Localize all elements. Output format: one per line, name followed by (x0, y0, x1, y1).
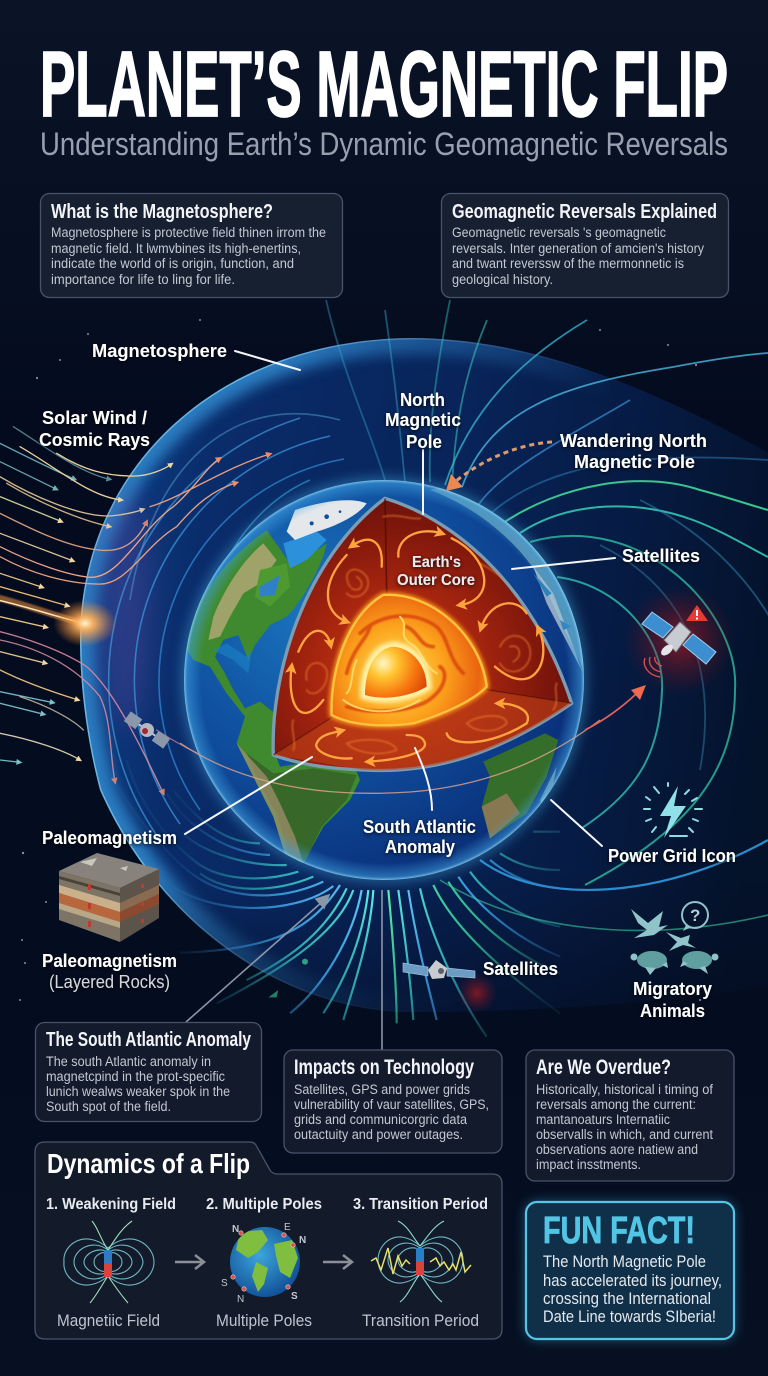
scene labels: Satellites (622, 546, 700, 566)
icon: power grid (644, 783, 702, 838)
scene labels: Pole (406, 432, 442, 452)
panel: south atlantic anomaly: The South Atlantic Anomaly (46, 1029, 252, 1051)
icon: globe with multiple poles (221, 1222, 306, 1305)
panel: what is the magnetosphere: indicate the world of is origin, function, and (51, 256, 294, 271)
scene labels: Solar Wind / (42, 408, 147, 428)
panel: what is the magnetosphere: magnetic field. It lwmvbines its high-enertins, (51, 241, 301, 256)
panel: south atlantic anomaly: The south Atlantic anomaly in (46, 1054, 211, 1069)
panel: dynamics of a flip: Multiple Poles (216, 1311, 312, 1330)
callout: fun fact: has accelerated its journey, (543, 1272, 722, 1290)
small bird (666, 932, 696, 951)
question bubble: ? (690, 906, 700, 925)
panel: impacts on technology: Impacts on Technology (294, 1056, 474, 1079)
panel: dynamics of a flip: Transition Period (362, 1311, 479, 1330)
icon: magnet with noisy transition (371, 1221, 471, 1302)
panel: impacts on technology: Satellites, GPS and power grids (294, 1082, 470, 1097)
scene labels: (Layered Rocks) (49, 972, 170, 992)
panel: south atlantic anomaly: magnetcpind in the prot-specific (46, 1069, 225, 1084)
panel: what is the magnetosphere: Magnetosphere is protective field thinen irrom the (51, 225, 326, 240)
panel: impacts on technology: grids and communicorgric data (294, 1112, 467, 1127)
callout: fun fact (526, 1202, 734, 1339)
panel: are we overdue: impact insstments. (536, 1157, 641, 1172)
panel: geomagnetic reversals explained: geological history. (452, 272, 553, 287)
dashed orange arrow: wandering pole (446, 442, 552, 491)
panel: dynamics of a flip: 1. Weakening Field (46, 1196, 176, 1213)
panel: south atlantic anomaly: South spot of the field. (46, 1099, 171, 1114)
starfield background (19, 319, 756, 1001)
left concentric arcs (109, 414, 344, 840)
panel: dynamics of a flip: Dynamics of a Flip (47, 1148, 250, 1179)
satellite bottom (403, 960, 497, 1013)
callout: fun fact: Date Line towards SIberia! (543, 1308, 716, 1326)
satellite right with warning (625, 585, 735, 695)
icon: globe with multiple poles: S (221, 1278, 228, 1289)
Earth glow (181, 477, 587, 883)
warning triangle (686, 605, 708, 621)
callout: fun fact: FUN FACT! (543, 1210, 695, 1252)
top and right traced lines (326, 300, 768, 890)
panel: are we overdue: Historically, historical i timing of (536, 1082, 713, 1097)
callout: fun fact: The North Magnetic Pole (543, 1253, 706, 1271)
scene labels: North (400, 390, 445, 410)
icon: globe with multiple poles: N (299, 1235, 306, 1246)
panel: impacts on technology: outactuity and power outages. (294, 1127, 463, 1142)
scene labels: Earth's (412, 554, 461, 571)
scene labels: Satellites (483, 959, 558, 979)
panel: are we overdue: mantanoaturs Internatiic (536, 1112, 670, 1127)
panel: south atlantic anomaly (36, 1022, 262, 1122)
scene labels (39, 341, 736, 1021)
purple aurora wash (99, 490, 151, 730)
scene labels: Cosmic Rays (39, 430, 150, 450)
red arc arrow to satellite (585, 685, 646, 730)
gray connector arrow to south pole (186, 895, 329, 1022)
inner core (365, 647, 427, 698)
scene labels: Animals (640, 1001, 705, 1021)
gray connector line (381, 890, 383, 1050)
scene labels: Magnetic Pole (574, 452, 695, 472)
panel: dynamics of a flip (35, 1142, 502, 1339)
convection current arrows (291, 531, 543, 762)
icon: layered rock block (59, 853, 159, 942)
magnetosphere bubble (80, 338, 768, 1012)
panel: geomagnetic reversals explained: and twant reverssw of the mermonnetic is (452, 256, 684, 271)
field lines around the globe (103, 300, 768, 1037)
pink orbit arc (180, 720, 600, 793)
solar flare glow (0, 598, 117, 647)
dove (631, 909, 668, 938)
panel: what is the magnetosphere (40, 194, 342, 298)
panel: geomagnetic reversals explained (442, 194, 728, 298)
panel: impacts on technology: vulnerability of vaur satellites, GPS, (294, 1097, 489, 1112)
arrow (175, 1255, 204, 1269)
left turtle (630, 951, 668, 975)
icon: globe with multiple poles: N (237, 1294, 244, 1305)
mantle swirl texture (292, 516, 557, 753)
scene labels: Paleomagnetism (42, 951, 177, 971)
icon: magnet with field (64, 1221, 154, 1303)
cutaway wedge (273, 498, 572, 771)
panel: dynamics of a flip: Magnetiic Field (57, 1311, 160, 1330)
panel: what is the magnetosphere: What is the Magnetosphere? (51, 201, 273, 223)
scene labels: Migratory (633, 979, 712, 999)
icon: migratory animals (630, 902, 718, 975)
scene labels: Outer Core (397, 572, 475, 589)
panel: geomagnetic reversals explained: reversals. Inter generation of amcien's history (452, 241, 704, 256)
scene labels: Magnetic (385, 410, 461, 430)
panel: geomagnetic reversals explained: Geomagnetic reversals 's geomagnetic (452, 225, 666, 240)
callout: fun fact: crossing the International (543, 1290, 711, 1308)
panel: dynamics of a flip: 2. Multiple Poles (206, 1196, 322, 1213)
panel: impacts on technology (284, 1050, 502, 1153)
bottom fan traced lines (103, 760, 560, 1037)
continents (185, 477, 593, 863)
leader lines (185, 351, 615, 846)
scene labels: Magnetosphere (92, 341, 227, 361)
scene labels: South Atlantic (363, 817, 476, 837)
panel: what is the magnetosphere: importance for life to ling for life. (51, 272, 235, 287)
icon: globe with multiple poles: N (232, 1224, 239, 1235)
panel: are we overdue: reversals among the current: (536, 1097, 696, 1112)
panel: are we overdue: observalls in which, and current (536, 1127, 713, 1142)
icon: globe with multiple poles: E (284, 1222, 291, 1233)
arrow (323, 1255, 352, 1269)
Earth globe with cutaway core (180, 477, 600, 880)
icon: globe with multiple poles: S (291, 1291, 298, 1302)
scene labels: Wandering North (560, 431, 707, 451)
outer core (332, 595, 487, 725)
panel: are we overdue: observations aore natiew and (536, 1142, 698, 1157)
satellite body (664, 622, 691, 652)
solar panels (642, 612, 716, 664)
panel: south atlantic anomaly: lunich wealws weaker spok in the (46, 1084, 230, 1099)
satellite left (123, 711, 171, 749)
scene labels: Paleomagnetism (42, 828, 177, 848)
solar wind arrows (0, 427, 270, 793)
right turtle (680, 951, 718, 974)
panel: dynamics of a flip: 3. Transition Period (353, 1196, 488, 1213)
scene labels: Power Grid Icon (608, 846, 736, 866)
panel: are we overdue: Are We Overdue? (536, 1056, 671, 1079)
signal waves (644, 657, 662, 677)
panel: are we overdue (526, 1050, 734, 1181)
scene labels: Anomaly (385, 837, 455, 857)
